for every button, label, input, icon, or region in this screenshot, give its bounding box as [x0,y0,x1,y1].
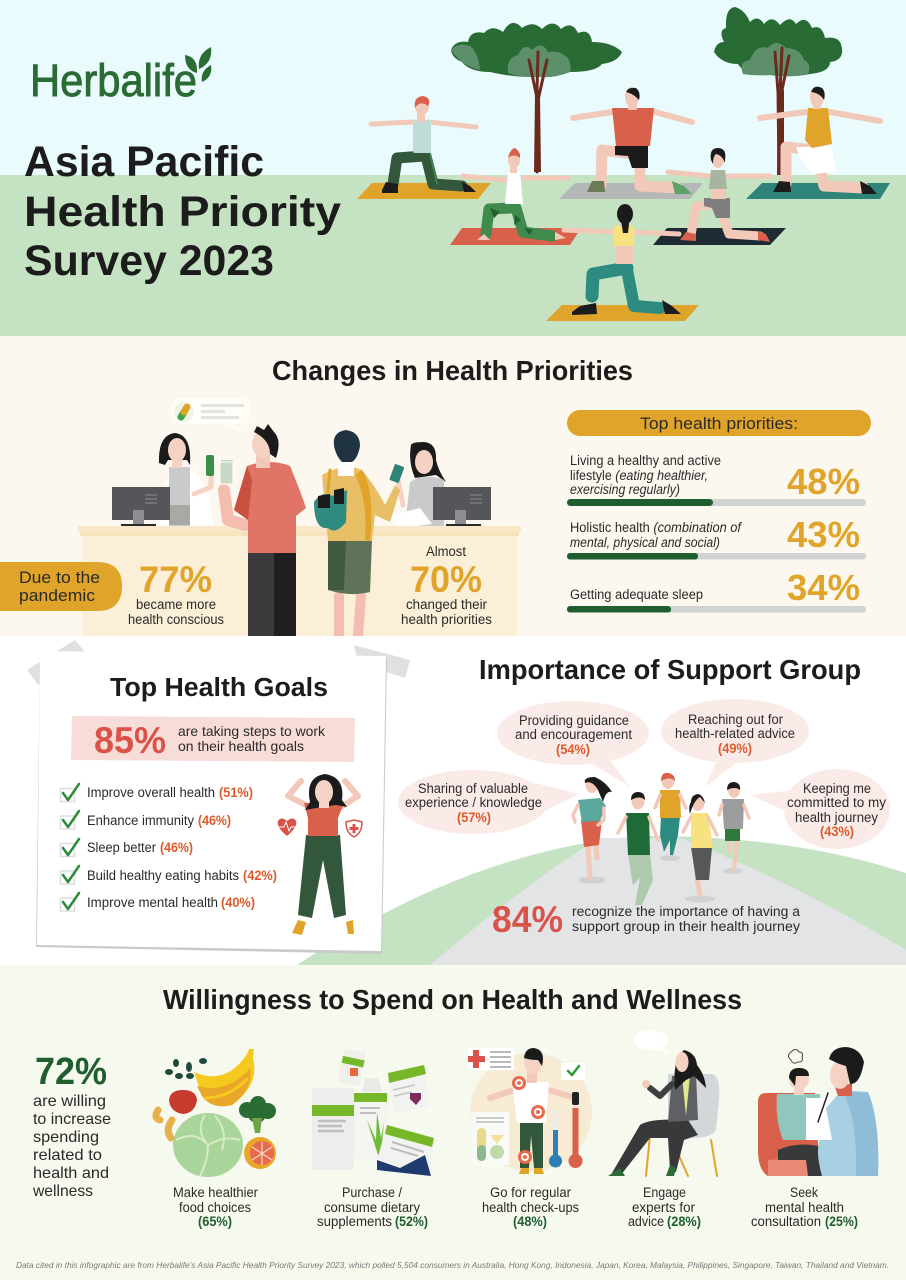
callout: sharing experience [398,770,580,834]
callout: due to the pandemic [0,562,122,611]
callout: keeping committed [750,769,890,849]
illustration: yoga person 1 [357,96,491,199]
title [24,138,341,285]
label: supplements: consume dietary [324,1200,420,1215]
illustration: yoga person 2 [450,148,581,245]
stat: 72% [32,1051,111,1200]
heading: Willingness to Spend on Health and Wellness [163,984,742,1015]
list item: build healthy eating habits [60,866,277,884]
stat: 70% [401,544,492,627]
callout: providing guidance: (54%) [556,742,590,757]
illustration: grey road [430,838,906,965]
list item: sleep better: (46%) [160,840,193,855]
runner: yellow top [683,794,717,902]
label: experts [628,1185,701,1229]
illustration: yoga person 6 [546,204,699,321]
label: supplements [317,1185,428,1229]
panel: header [0,0,906,336]
label: experts: Engage [643,1185,686,1200]
label: check-ups [482,1185,579,1229]
stat: 70%: health priorities [401,612,492,627]
illustration: monitor left [112,487,170,527]
label: supplements: (52%) [395,1214,428,1229]
callout: sharing experience: Sharing of valuable [418,781,528,796]
list item: enhance immunity: (46%) [198,813,231,828]
callout: reaching out: Reaching out for [688,712,784,727]
list item: sleep better [60,839,193,856]
label: experts: advice [628,1214,664,1229]
illustration: monitor right [433,487,491,527]
label: check-ups: health check-ups [482,1200,579,1215]
priority: holistic health 43%: 43% [787,514,860,555]
stat: 72%: are willing [33,1093,106,1110]
label: consultation: mental health [765,1200,844,1215]
callout: 85%: on their health goals [178,739,304,754]
label: check-ups: (48%) [513,1214,547,1229]
callout: providing guidance [497,701,649,787]
stat: 77% [128,559,224,627]
callout: providing guidance: Providing guidance [519,713,629,728]
illustration: pharmacy staff left [155,433,233,526]
priority: healthy lifestyle 48%: exercising regularly) [570,482,680,497]
runner: grey top [719,782,749,874]
illustration: tree right [714,7,842,175]
illustration: healthy food [156,1049,276,1177]
illustration: yoga person 3 [559,87,703,199]
list item: enhance immunity: Enhance immunity [87,813,194,828]
list item: improve mental health: Improve mental health [87,895,218,910]
title: Survey 2023 [24,237,274,285]
illustration: customer in yellow hoodie [314,430,404,636]
stat: 77%: health conscious [128,612,224,627]
callout: sharing experience: (57%) [457,810,491,825]
label: food choices: (65%) [198,1214,232,1229]
label: supplements: Purchase / [342,1185,402,1200]
priority: adequate sleep 34% [567,567,866,612]
stat: 72%: to increase [33,1111,111,1128]
list item: improve overall health: Improve overall health [87,785,215,800]
callout: reaching out [661,699,809,787]
runner: orange top [655,773,686,861]
runner: green top [618,792,658,905]
stat: 77%: became more [136,597,216,612]
heading pill: top health priorities [567,410,871,436]
priority: holistic health 43%: mental, physical and social) [570,535,720,550]
callout: 85%: 85% [94,720,166,761]
callout: reaching out: health-related advice [675,726,795,741]
stat: 72%: spending [33,1129,99,1146]
illustration: yoga person 4 [0,0,890,199]
callout: providing guidance: and encouragement [515,727,632,742]
label: food choices: food choices [179,1200,251,1215]
illustration: engaging experts [608,1030,719,1176]
panel: willingness to spend [0,965,906,1280]
priority: healthy lifestyle 48%: Living a healthy and active [570,453,721,468]
callout: reaching out: (49%) [718,741,752,756]
callout: keeping committed: committed to my [787,795,886,810]
label: consultation: (25%) [825,1214,858,1229]
label: check-ups: Go for regular [490,1185,572,1200]
stat: 84% [492,899,801,940]
priority: healthy lifestyle 48%: lifestyle (eating healthier, [570,468,708,483]
illustration: health check-ups [468,1048,592,1174]
stat: 72%: 72% [35,1051,107,1093]
heading: importance of support group: Importance of Support Group [479,654,861,685]
list item: sleep better: Sleep better [87,840,157,855]
runner: teal top [573,777,612,884]
illustration: pharmacy staff right [388,442,446,528]
callout: due to the pandemic: pandemic [19,586,96,605]
label: consultation [751,1185,858,1229]
panel: goals and support group [0,636,906,965]
callout: 85%: are taking steps to work [178,724,325,739]
icon: shield [346,820,362,837]
illustration: mental health consultation [758,1047,878,1176]
callout: due to the pandemic: Due to the [19,568,100,587]
footnote: Data cited in this infographic are from Herbalife's Asia Pacific Health Priority Survey 2023, which polled 5,504 consumers in Australia, Hong Kong, Indonesia, Japan, Korea, Malaysia, Philippines, Singapore, Taiwan, Thailand and Vietnam. [16,1260,889,1270]
list item: improve mental health: (40%) [221,895,255,910]
label: consultation: consultation [751,1214,821,1229]
label: supplements: supplements [317,1214,392,1229]
priority: adequate sleep 34%: 34% [787,567,860,608]
callout: keeping committed: health journey [795,810,878,825]
stat: 77%: 77% [139,559,212,600]
callout: sharing experience: experience / knowledge [405,795,542,810]
list item: build healthy eating habits: Build healthy eating habits [87,868,239,883]
stat: 70%: Almost [426,544,466,559]
stat: 72%: wellness [32,1183,93,1200]
stat: 72%: related to [33,1147,102,1164]
illustration: yoga person 5 [653,148,786,245]
label: consultation: Seek [790,1185,818,1200]
title: Health Priority [24,188,341,236]
callout: keeping committed: Keeping me [803,781,871,796]
stat: 84%: recognize the importance of having a [572,904,801,919]
illustration: speech bubble with pill [171,398,251,432]
logo: Herbalife: Herbalife [30,55,197,106]
panel: changes in health priorities [0,336,906,636]
list item: build healthy eating habits: (42%) [243,868,277,883]
callout: keeping committed: (43%) [820,824,854,839]
icon: heart [278,818,296,836]
illustration: tree left [451,23,622,172]
illustration: runners [573,773,749,905]
stat: 84%: 84% [492,899,563,940]
label: food choices [173,1185,259,1229]
stat: 70%: changed their [406,597,488,612]
illustration: woman flexing [288,774,358,935]
stat: 84%: support group in their health journey [572,919,800,934]
heading pill: top health priorities: Top health priorities: [640,415,798,433]
illustration: dietary supplements [312,1048,434,1176]
priority: holistic health 43%: Holistic health (combination of [570,520,742,535]
priority: adequate sleep 34%: Getting adequate sleep [570,587,703,602]
illustration: green hill [297,836,906,965]
stat: 72%: health and [33,1165,109,1182]
stat: 70%: 70% [410,559,482,600]
list item: improve overall health [60,784,253,802]
label: food choices: Make healthier [173,1185,259,1200]
list item: enhance immunity [60,811,231,829]
priority: healthy lifestyle 48% [567,453,866,506]
label: experts: experts for [632,1200,696,1215]
priority: holistic health 43% [567,514,866,560]
heading: Changes in Health Priorities [272,355,633,386]
list item: improve mental health [60,893,255,911]
illustration: man in red tee [220,424,306,636]
heading: Top Health Goals [110,674,328,702]
label: experts: (28%) [667,1214,701,1229]
priority: healthy lifestyle 48%: 48% [787,461,860,502]
callout: 85% [71,716,355,762]
list item: improve overall health: (51%) [219,785,253,800]
panel: top health goals note [27,640,410,954]
counter [78,526,521,636]
title: Asia Pacific [24,138,264,186]
